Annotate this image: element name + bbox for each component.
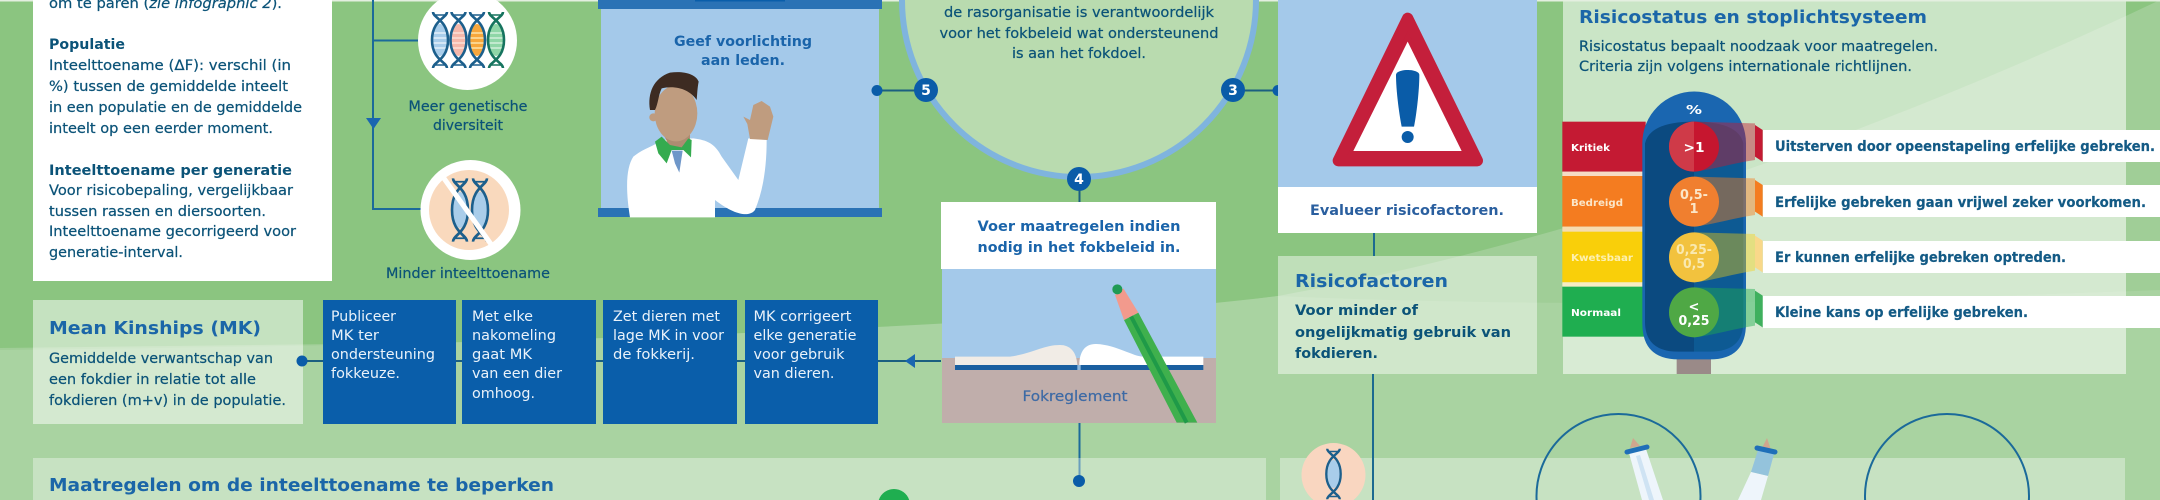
label: normaal: Normaal xyxy=(1571,308,1621,319)
box: publiceer MK: MK ter xyxy=(331,328,379,344)
icon: minder inteelttoename xyxy=(420,160,520,260)
callout: er kunnen erfelijke gebreken xyxy=(1763,241,2160,273)
box: MK corrigeert: elke generatie xyxy=(754,328,856,344)
callout: kleine kans: Kleine kans op erfelijke gebreken. xyxy=(1775,305,2028,321)
text: inteelttoename definition: Inteelttoename (ΔF): verschil (in xyxy=(49,58,291,74)
box: nakomeling MK: gaat MK xyxy=(472,347,533,363)
label: kwetsbaar xyxy=(1571,243,1712,272)
label: bedreigd: Bedreigd xyxy=(1571,198,1623,209)
text: risicostatus intro xyxy=(1579,39,1938,75)
label: normaal: 0,25 xyxy=(1678,314,1710,329)
text: geef voorlichting aan leden: Geef voorlichting xyxy=(674,34,812,50)
icon: meer genetische diversiteit xyxy=(418,0,517,90)
callout: er kunnen erfelijke gebreken: Er kunnen erfelijke gebreken optreden. xyxy=(1775,250,2066,266)
label: bedreigd xyxy=(1571,188,1708,217)
icon: ring with syringe xyxy=(1537,414,1700,500)
box: MK corrigeert xyxy=(745,300,878,424)
text: mean kinship definition xyxy=(49,351,286,409)
text: fokbeleid responsibility: voor het fokbeleid wat ondersteunend xyxy=(940,26,1218,42)
box: nakomeling MK xyxy=(462,300,596,424)
text: per generatie explanation: Voor risicobepaling, vergelijkbaar xyxy=(49,183,293,199)
text: risicostatus intro: Criteria zijn volgens internationale richtlijnen. xyxy=(1579,59,1912,75)
panel: lower right xyxy=(1280,458,2125,500)
heading: risicofactoren: Risicofactoren xyxy=(1295,271,1448,292)
label: meer genetische diversiteit xyxy=(408,99,528,134)
panel: voer maatregelen in xyxy=(941,190,1216,423)
box: publiceer MK: fokkeuze. xyxy=(331,366,400,382)
panel: evalueer risicofactoren xyxy=(1278,0,1537,233)
callout: erfelijke gebreken vrijwel zeker: Erfelijke gebreken gaan vrijwel zeker voorkomen. xyxy=(1775,195,2146,211)
text: mean kinship definition: fokdieren (m+v) in de populatie. xyxy=(49,393,286,409)
text: per generatie explanation: generatie-interval. xyxy=(49,245,183,261)
arrow: branching line with down arrow xyxy=(366,0,423,209)
text: voer maatregelen: Voer maatregelen indien xyxy=(978,219,1180,235)
step number 4 xyxy=(1067,167,1091,191)
panel: risicostatus en stoplichtsysteem xyxy=(1562,2,2160,374)
callout: kleine kans xyxy=(1763,296,2160,328)
text: evalueer risicofactoren: Evalueer risicofactoren. xyxy=(1310,203,1504,219)
label: kwetsbaar: 0,5 xyxy=(1683,257,1705,272)
box: publiceer MK xyxy=(323,300,456,424)
text: risicofactoren body xyxy=(1295,303,1511,362)
heading: risicostatus: Risicostatus en stoplichtsysteem xyxy=(1579,7,1927,28)
label: kritiek: Kritiek xyxy=(1571,143,1610,154)
panel: geef voorlichting xyxy=(598,0,882,217)
step number 5 xyxy=(914,78,938,102)
text: mean kinship definition: Gemiddelde verwantschap van xyxy=(49,351,273,367)
box: lage MK: Zet dieren met xyxy=(613,309,721,325)
label: meer genetische diversiteit: diversiteit xyxy=(433,118,503,134)
text: fokbeleid responsibility: de rasorganisatie is verantwoordelijk xyxy=(944,5,1215,21)
heading: maatregelen: Maatregelen om de inteelttoename te beperken xyxy=(49,475,554,496)
callout: uitsterven xyxy=(1763,130,2160,162)
heading: inteelttoename per generatie: Inteelttoename per generatie xyxy=(49,163,292,179)
text: risicofactoren body: ongelijkmatig gebruik van xyxy=(1295,325,1511,341)
label: bedreigd: 1 xyxy=(1689,202,1699,217)
text: inteelttoename definition xyxy=(49,58,302,137)
icon: dna oval xyxy=(1302,443,1366,500)
connector: MK row with arrow xyxy=(296,354,941,368)
label: kwetsbaar: Kwetsbaar xyxy=(1571,253,1633,264)
text: risicostatus intro: Risicostatus bepaalt noodzaak voor maatregelen. xyxy=(1579,39,1938,55)
connector: risicofactoren down xyxy=(1373,233,1374,500)
text: inteelttoename definition: inteelt op een eerder moment. xyxy=(49,121,273,137)
box: MK corrigeert: voor gebruik xyxy=(754,347,845,363)
box: lage MK xyxy=(603,300,737,424)
text: fokreglement: Fokreglement xyxy=(1022,389,1128,405)
icon: syringe blue xyxy=(1738,438,1775,500)
text: voer maatregelen: nodig in het fokbeleid in. xyxy=(978,240,1180,256)
box: nakomeling MK: van een dier xyxy=(472,366,562,382)
text: risicofactoren body: fokdieren. xyxy=(1295,346,1378,362)
box: lage MK: de fokkerij. xyxy=(613,347,695,363)
text: per generatie explanation: tussen rassen en diersoorten. xyxy=(49,204,266,220)
box: MK corrigeert: van dieren. xyxy=(754,366,834,382)
dot: fokreglement connector end xyxy=(1073,475,1085,487)
label: minder inteelttoename: Minder inteelttoename xyxy=(386,266,550,282)
icon: second ring xyxy=(1865,414,2029,500)
text: per generatie explanation xyxy=(49,183,296,261)
connector: step 5 xyxy=(872,85,926,96)
illustration: fokreglement book and pencil xyxy=(942,269,1216,423)
connector: step 3 xyxy=(1233,85,1284,96)
step number 5: 5 xyxy=(921,83,931,99)
label: percent: % xyxy=(1686,103,1702,117)
label: kritiek xyxy=(1571,141,1704,156)
heading: Populatie: Populatie xyxy=(49,37,125,53)
box: publiceer MK: Publiceer xyxy=(331,309,396,325)
label: meer genetische diversiteit: Meer genetische xyxy=(408,99,528,115)
text: geef voorlichting aan leden xyxy=(674,34,812,69)
box: nakomeling MK: nakomeling xyxy=(472,328,556,344)
step number 3: 3 xyxy=(1228,83,1238,99)
text: mean kinship definition: een fokdier in relatie tot alle xyxy=(49,372,256,388)
chart: traffic light xyxy=(1562,92,1763,374)
box: nakomeling MK: Met elke xyxy=(472,309,533,325)
icon: warning triangle xyxy=(1338,18,1477,161)
label: bedreigd: 0,5- xyxy=(1680,188,1708,203)
text: risicofactoren body: Voor minder of xyxy=(1295,303,1419,319)
icon: man presenting xyxy=(627,72,773,217)
text: inteelttoename definition: in een populatie en de gemiddelde xyxy=(49,100,302,116)
step number 3 xyxy=(1221,78,1245,102)
connector: fokreglement to maatregelen xyxy=(1078,423,1080,481)
panel: mean kinships xyxy=(33,300,303,424)
text: voer maatregelen xyxy=(978,219,1180,256)
label: kritiek: >1 xyxy=(1684,141,1704,156)
step number 4: 4 xyxy=(1074,172,1084,188)
label: normaal xyxy=(1571,300,1710,329)
text: inteelttoename definition: %) tussen de gemiddelde inteelt xyxy=(49,79,289,95)
label: normaal: < xyxy=(1689,300,1699,315)
text: fokbeleid responsibility xyxy=(940,5,1218,62)
panel: risicofactoren xyxy=(1278,256,1537,374)
box: nakomeling MK: omhoog. xyxy=(472,386,535,402)
panel: central circle fokbeleid xyxy=(902,0,1256,191)
text: per generatie explanation: Inteelttoename gecorrigeerd voor xyxy=(49,224,296,240)
panel: maatregelen beperken xyxy=(33,458,1266,500)
icon: green circle xyxy=(879,489,909,500)
panel: populatie definitions xyxy=(33,0,332,281)
label: kwetsbaar: 0,25- xyxy=(1676,243,1712,258)
box: MK corrigeert: MK corrigeert xyxy=(754,309,852,325)
text: fokbeleid responsibility: is aan het fokdoel. xyxy=(1012,46,1146,62)
callout: erfelijke gebreken vrijwel zeker xyxy=(1763,185,2160,217)
box: publiceer MK: ondersteuning xyxy=(331,347,435,363)
heading: mean kinships: Mean Kinships (MK) xyxy=(49,318,261,339)
box: lage MK: lage MK in voor xyxy=(613,328,724,344)
text: geef voorlichting aan leden: aan leden. xyxy=(701,53,785,69)
